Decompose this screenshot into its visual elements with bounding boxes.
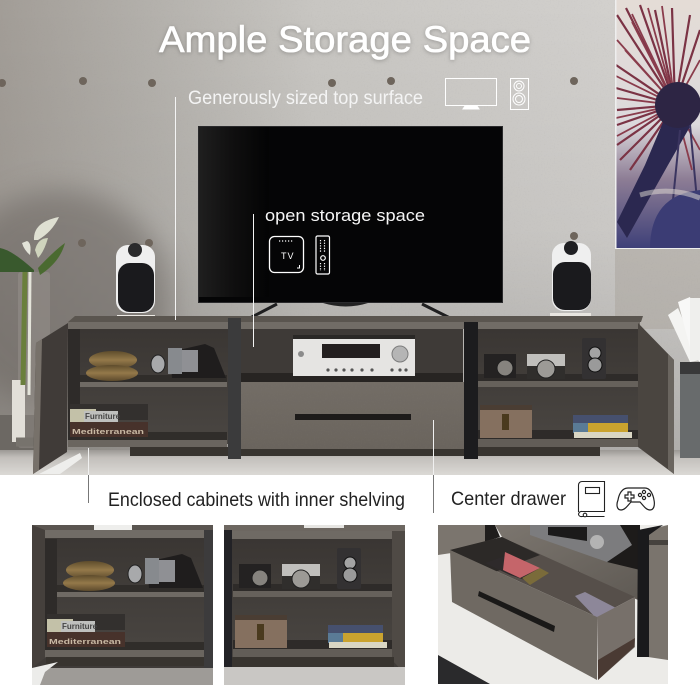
white lower panel <box>0 475 700 700</box>
left speaker <box>116 243 155 321</box>
label: enclosed cabinets: Enclosed cabinets with inner shelving <box>108 489 405 511</box>
label: open storage: open storage space <box>265 206 425 225</box>
photo book label: Furniture <box>62 622 98 631</box>
drawer interior <box>450 537 635 617</box>
left door <box>33 323 68 474</box>
heading: Ample Storage Space <box>159 19 531 60</box>
photo book title: Mediterranean <box>49 637 122 646</box>
plant in glass vase <box>0 217 65 448</box>
amplifier <box>530 525 632 562</box>
black post <box>637 525 663 657</box>
rolled papers and metal bin <box>668 297 700 458</box>
left cabinet with shelves <box>68 329 227 447</box>
right side panel <box>648 525 668 660</box>
callout: center drawer <box>433 420 566 513</box>
icon: book <box>578 482 604 517</box>
right cabinet with shelves <box>478 338 640 447</box>
dark recess behind amplifier <box>607 525 640 570</box>
cabinet behind drawer <box>438 525 485 555</box>
label: center drawer: Center drawer <box>451 488 566 510</box>
floor reflection under left door <box>39 453 82 474</box>
rug <box>438 655 490 684</box>
icon: remote control <box>316 236 330 274</box>
icon: tv box: TV <box>281 251 295 261</box>
TV stand base <box>68 316 643 459</box>
icon: game controller <box>617 488 654 510</box>
icon: speaker outline <box>510 78 528 110</box>
drawer front <box>450 550 597 680</box>
photo: open drawer detail <box>438 525 668 684</box>
right door <box>638 323 674 474</box>
wall poster <box>615 0 700 250</box>
center drawer <box>241 382 464 449</box>
drawer books <box>500 569 538 580</box>
open compartment amplifier <box>293 335 415 376</box>
photo: right cabinet detail <box>224 525 405 685</box>
television <box>198 126 503 319</box>
icon: tv box <box>270 236 304 272</box>
right speaker <box>550 241 591 320</box>
room scene photo <box>0 0 700 475</box>
label: top surface: Generously sized top surface <box>188 88 423 109</box>
drawer side <box>597 597 635 680</box>
drawer handle <box>478 591 555 632</box>
book spine text left: Furniture <box>85 412 121 421</box>
concrete wall <box>0 0 700 460</box>
icon: tv outline <box>446 78 496 109</box>
photo: left cabinet detail <box>32 525 213 685</box>
book title left: Mediterranean <box>72 427 145 436</box>
floor <box>0 450 700 475</box>
